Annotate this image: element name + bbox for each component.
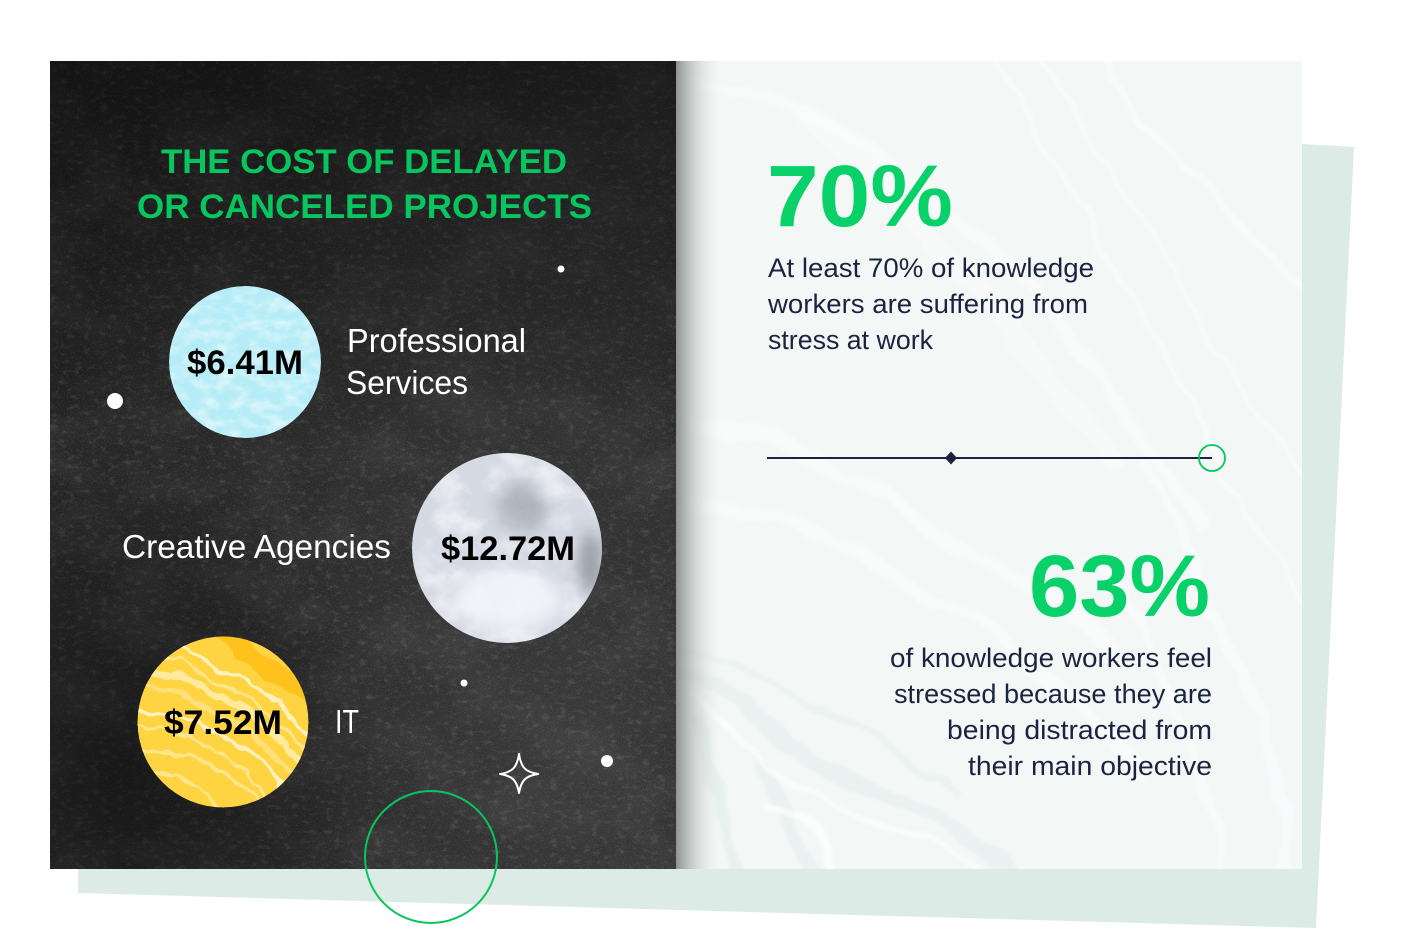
stat: 70 percent <box>767 148 1094 355</box>
divider with diamond and circle <box>767 445 1225 471</box>
panel: light marble stats panel <box>676 40 1320 880</box>
heading: the cost of delayed or canceled projects: OR CANCELED PROJECTS <box>137 188 592 226</box>
panel: dark textured cost panel <box>50 61 676 869</box>
description: 63 percent <box>890 643 1212 781</box>
decorative white dots <box>107 266 613 767</box>
background card: tilted mint backing sheet <box>78 144 1354 928</box>
planet: creative agencies: $12.72M <box>441 530 575 568</box>
description: 63 percent: of knowledge workers feel <box>890 643 1212 673</box>
heading: the cost of delayed or canceled projects <box>137 143 592 226</box>
stat: 63 percent: 63% <box>1029 538 1210 635</box>
planet: IT <box>138 636 308 808</box>
planet: creative agencies <box>412 453 604 643</box>
description: 70 percent <box>767 253 1094 355</box>
description: 63 percent: being distracted from <box>947 715 1212 745</box>
heading: the cost of delayed or canceled projects: THE COST OF DELAYED <box>161 143 567 181</box>
planet: professional services <box>169 286 321 438</box>
description: 70 percent: At least 70% of knowledge <box>768 253 1094 283</box>
description: 70 percent: workers are suffering from <box>767 289 1088 319</box>
stat: 63 percent <box>890 538 1212 781</box>
label: professional services: Professional <box>347 322 526 359</box>
planet: IT: $7.52M <box>164 704 282 742</box>
description: 63 percent: stressed because they are <box>894 679 1212 709</box>
description: 63 percent: their main objective <box>968 751 1212 781</box>
icon: green outline circle <box>365 791 497 923</box>
label: IT: IT <box>335 703 359 740</box>
icon: four-point star outline <box>500 754 538 793</box>
description: 70 percent: stress at work <box>768 325 933 355</box>
stat: 70 percent: 70% <box>767 148 953 245</box>
label: professional services <box>346 322 526 401</box>
planet: professional services: $6.41M <box>187 344 303 382</box>
label: creative agencies: Creative Agencies <box>122 528 391 565</box>
label: professional services: Services <box>346 364 468 401</box>
